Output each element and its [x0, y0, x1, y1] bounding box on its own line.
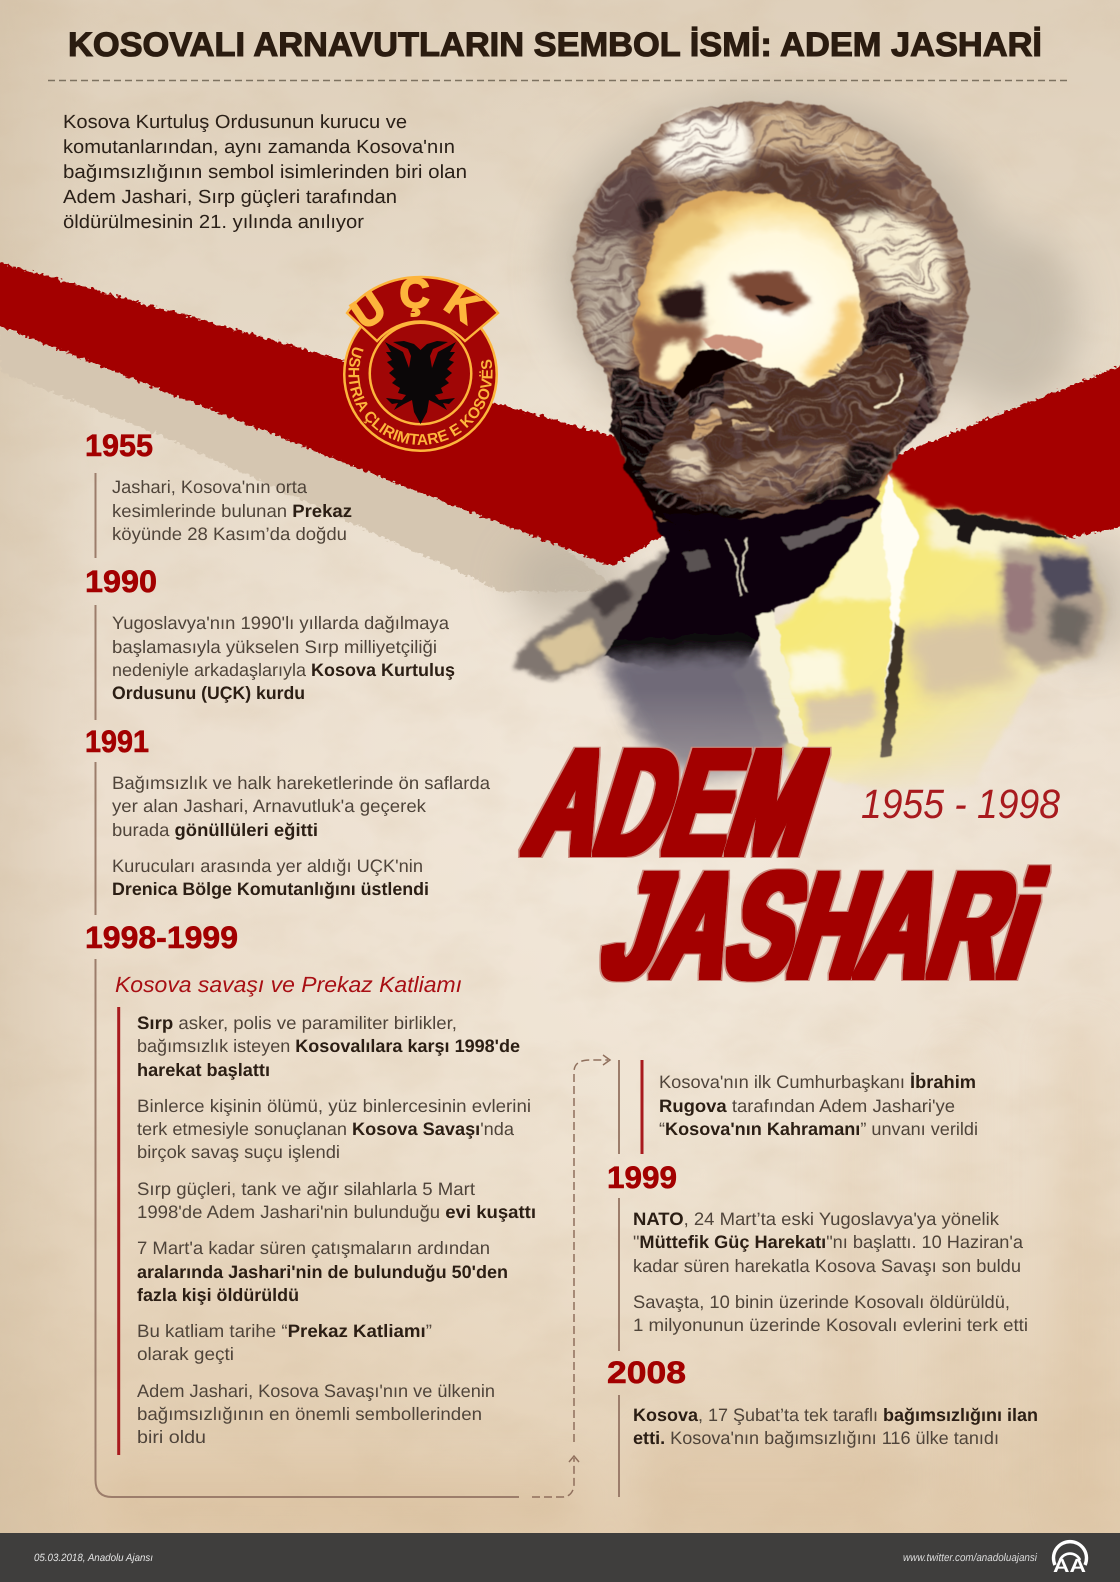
- red diagonal stripe, left: [0, 260, 672, 566]
- 1998-1999 section: Sırp asker, polis ve paramiliter birlikler,: [137, 1013, 457, 1033]
- 2008 section: etti. Kosova'nın bağımsızlığını 116 ülke tanıdı: [633, 1428, 999, 1448]
- 1999 section: [607, 1160, 1028, 1351]
- life dates: 1955 - 1998: [861, 781, 1060, 827]
- intro text: [63, 112, 467, 233]
- 1998-1999 section: birçok savaş suçu işlendi: [137, 1142, 340, 1162]
- intro text: Kosova Kurtuluş Ordusunun kurucu ve: [63, 112, 407, 133]
- tan shadow band under the red stripe: [0, 318, 620, 592]
- red diagonal stripe, right: [880, 362, 1120, 537]
- beard: [614, 345, 925, 525]
- beard light streak texture: [611, 340, 938, 516]
- footer url: www.twitter.com/anadoluajansi: [903, 1552, 1037, 1564]
- 1990 section: başlamasıyla yükselen Sırp milliyetçiliği: [112, 637, 437, 657]
- nose: [700, 336, 763, 363]
- 1998-1999 section: 1998'de Adem Jashari'nin bulunduğu evi kuşattı: [137, 1202, 536, 1222]
- grey ink smudges behind portrait: [510, 95, 1120, 660]
- 1955 section: [85, 428, 352, 558]
- intro text: komutanlarından, aynı zamanda Kosova'nın: [63, 137, 455, 158]
- 1999 section: kadar süren harekatla Kosova Savaşı son buldu: [633, 1256, 1021, 1276]
- 1991 section: Bağımsızlık ve halk hareketlerinde ön saflarda: [112, 773, 491, 793]
- icon: AA logo: AA: [1053, 1556, 1086, 1577]
- 1998-1999 section: biri oldu: [137, 1427, 206, 1447]
- 1998-1999 section: Bu katliam tarihe “ Prekaz Katliamı ”: [137, 1321, 432, 1341]
- black coat and collar: [600, 488, 880, 790]
- 1990 section: [85, 564, 455, 720]
- 2008 section: [607, 1355, 1038, 1497]
- 1991 section: 1991: [85, 724, 149, 759]
- UÇK emblem: [343, 276, 500, 452]
- hair dark streak texture: [572, 102, 970, 460]
- neck black under beard: [660, 492, 880, 540]
- 1991 section: [85, 724, 491, 915]
- jacket: [760, 474, 1108, 790]
- 1955 section: köyünde 28 Kasım’da doğdu: [112, 524, 347, 544]
- Rugova continuation block: “Kosova'nın Kahramanı” unvanı verildi: [659, 1119, 978, 1139]
- timeline connector: [96, 959, 519, 1497]
- subheading: Kosova savaşı ve Prekaz Katliamı: [115, 972, 462, 997]
- 1991 section: Drenica Bölge Komutanlığını üstlendi: [112, 879, 429, 899]
- 1991 section: burada gönüllüleri eğitti: [112, 820, 318, 840]
- ear highlight: [876, 373, 903, 408]
- 1998-1999 section: harekat başlattı: [137, 1060, 270, 1080]
- 2008 section: Kosova, 17 Şubat’ta tek taraflı bağımsızlığını ilan: [633, 1405, 1038, 1425]
- portrait of Adem Jashari: [511, 100, 1110, 789]
- intro text: öldürülmesinin 21. yılında anılıyor: [63, 212, 365, 233]
- icon: AA logo: [1053, 1542, 1087, 1577]
- beard dark streak texture: [612, 357, 938, 516]
- 1955 section: kesimlerinde bulunan Prekaz: [112, 501, 352, 521]
- 1999 section: NATO, 24 Mart’ta eski Yugoslavya'ya yönelik: [633, 1209, 1000, 1229]
- Rugova continuation block: Kosova'nın ilk Cumhurbaşkanı İbrahim: [659, 1072, 976, 1092]
- Rugova continuation block: Rugova tarafından Adem Jashari'ye: [659, 1096, 955, 1116]
- 1998-1999 section: [85, 920, 536, 1455]
- emblem eagle: [385, 341, 456, 424]
- emblem letters: UÇK: [348, 278, 484, 326]
- 1998-1999 section: bağımsızlığının en önemli sembollerinden: [137, 1404, 482, 1424]
- emblem ring text: USHTRIA ÇLIRIMTARE E KOSOVËS: [348, 347, 493, 445]
- dashed title rule: [48, 80, 1068, 82]
- 1991 section: yer alan Jashari, Arnavutluk'a geçerek: [112, 796, 427, 816]
- 1999 section: "Müttefik Güç Harekatı"nı başlattı. 10 Haziran'a: [633, 1232, 1024, 1252]
- name: JASHARI: JASHARi: [586, 841, 1062, 1009]
- dashed connector with arrows: [532, 1055, 610, 1497]
- 1990 section: Yugoslavya'nın 1990'lı yıllarda dağılmaya: [112, 613, 450, 633]
- face: [633, 192, 863, 402]
- 1998-1999 section: aralarında Jashari'nin de bulunduğu 50'den: [137, 1262, 508, 1282]
- footer date: 05.03.2018, Anadolu Ajansı: [34, 1552, 153, 1564]
- title: KOSOVALI ARNAVUTLARIN SEMBOL İSMİ: ADEM JASHARİ: [68, 26, 1042, 64]
- 1998-1999 section: terk etmesiyle sonuçlanan Kosova Savaşı'nda: [137, 1119, 515, 1139]
- 1991 section: Kurucuları arasında yer aldığı UÇK'nin: [112, 856, 423, 876]
- hair mass: [572, 101, 969, 520]
- 1990 section: nedeniyle arkadaşlarıyla Kosova Kurtuluş: [112, 660, 455, 680]
- 1955 section: 1955: [85, 428, 153, 463]
- 1990 section: Ordusunu (UÇK) kurdu: [112, 683, 305, 703]
- 1998-1999 section: bağımsızlık isteyen Kosovalılara karşı 1998'de: [137, 1036, 520, 1056]
- 1990 section: 1990: [85, 564, 157, 599]
- red rule: [117, 1007, 120, 1455]
- 1998-1999 section: olarak geçti: [137, 1344, 234, 1364]
- hair light streak texture: [571, 102, 969, 460]
- left shoulder: [512, 550, 690, 680]
- intro text: bağımsızlığının sembol isimlerinden biri olan: [63, 162, 467, 183]
- name: ADEM: ADEM: [511, 718, 843, 886]
- 1998-1999 section: Sırp güçleri, tank ve ağır silahlarla 5 Mart: [137, 1179, 475, 1199]
- right brow and eye: [732, 273, 812, 312]
- intro text: Adem Jashari, Sırp güçleri tarafından: [63, 187, 397, 208]
- 1998-1999 section: Adem Jashari, Kosova Savaşı'nın ve ülkenin: [137, 1381, 495, 1401]
- 1999 section: 1999: [607, 1160, 677, 1195]
- 1998-1999 section: Binlerce kişinin ölümü, yüz binlercesinin evlerini: [137, 1096, 531, 1116]
- left eye socket: [659, 286, 706, 322]
- 1955 section: Jashari, Kosova'nın orta: [112, 477, 308, 497]
- footer bar: [0, 1533, 1120, 1582]
- 2008 section: 2008: [607, 1355, 686, 1390]
- 1998-1999 section: 7 Mart'a kadar süren çatışmaların ardından: [137, 1238, 490, 1258]
- emblem banner: [347, 277, 498, 341]
- 1998-1999 section: 1998-1999: [85, 920, 238, 955]
- Rugova continuation block: [619, 1060, 978, 1154]
- 1999 section: 1 milyonunun üzerinde Kosovalı evlerini terk etti: [633, 1315, 1028, 1335]
- 1998-1999 section: fazla kişi öldürüldü: [137, 1285, 299, 1305]
- 1999 section: Savaşta, 10 binin üzerinde Kosovalı öldürüldü,: [633, 1292, 1010, 1312]
